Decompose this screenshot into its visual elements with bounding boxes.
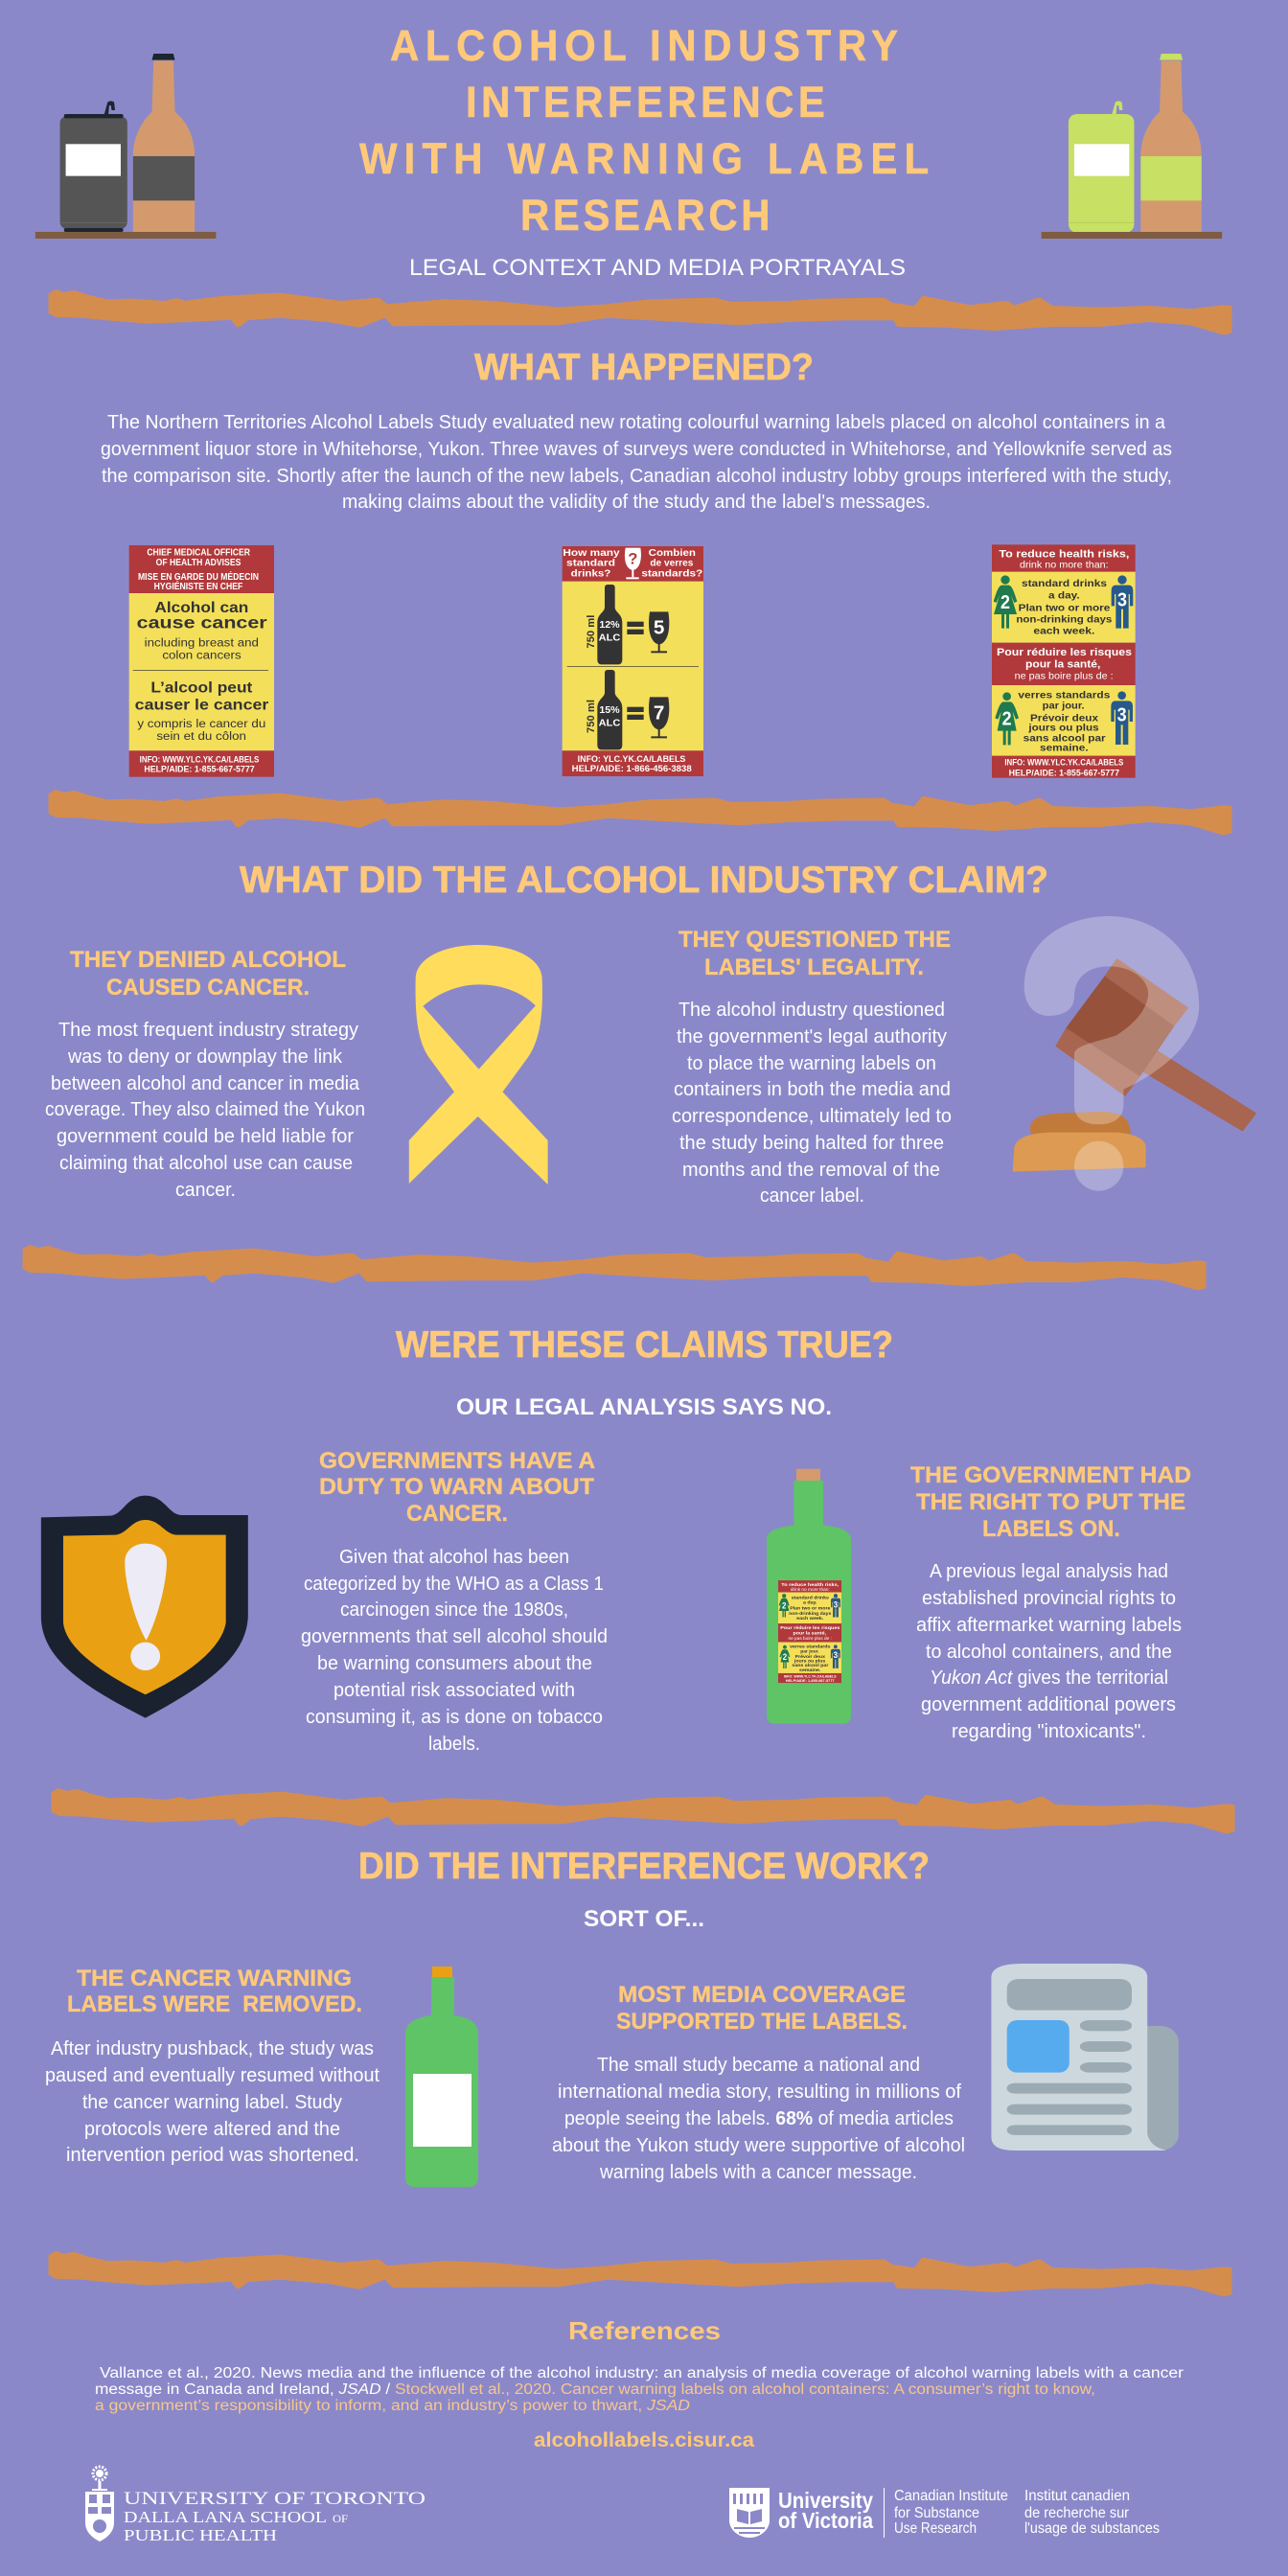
heading: labels removed: LABELS WERE REMOVED. (67, 1991, 362, 2017)
text: right to put labels body: affix aftermarket warning labels (916, 1614, 1182, 1636)
heading: they denied (70, 947, 346, 1000)
warning label: reduce health risks: HELP/AIDE: 1-855-667-5777 (1009, 768, 1119, 777)
subtitle: LEGAL CONTEXT AND MEDIA PORTRAYALS (409, 255, 906, 281)
warning label: standard drinks: ? (628, 550, 637, 568)
intro paragraph (101, 411, 1172, 513)
intro paragraph: making claims about the validity of the study and the label's messages. (342, 491, 931, 513)
warning label: reduce health risks: 3 (1117, 705, 1127, 726)
heading: duty to warn (319, 1448, 595, 1527)
warning label: cancer: causer le cancer (135, 698, 268, 714)
text: duty to warn body (301, 1546, 608, 1755)
warning label: cancer: L’alcool peut (150, 680, 252, 697)
warning label: cancer: INFO: WWW.YLC.YK.CA/LABELS (140, 754, 259, 764)
warning label: standard drinks: Combien (649, 548, 696, 559)
heading: labels removed: THE CANCER WARNING (77, 1966, 352, 1991)
logo: University of Victoria CISUR: Canadian Institute (894, 2488, 1008, 2504)
text: right to put labels body: government additional powers (921, 1693, 1176, 1715)
heading: did the interference work: DID THE INTERFERENCE WORK? (358, 1846, 930, 1887)
warning label: reduce health risks: par jour. (1043, 702, 1085, 712)
text: references: a government’s responsibility to inform, and an industry’s power to thwart, JSAD (95, 2398, 690, 2414)
logo: University of Victoria CISUR: Institut canadien (1024, 2488, 1130, 2504)
warning label: cancer: including breast and (145, 635, 259, 649)
warning label: cancer: HELP/AIDE: 1-855-667-5777 (144, 764, 255, 773)
heading: right to put labels (910, 1462, 1191, 1542)
text: questioned body: the government's legal authority (677, 1025, 948, 1047)
warning label: reduce health risks: Plan two or more (1019, 604, 1111, 614)
warning label: standard drinks: drinks? (571, 569, 610, 580)
heading: were these claims true: WERE THESE CLAIMS TRUE? (396, 1324, 893, 1366)
title (359, 23, 929, 240)
warning label: standard drinks: 5 (654, 617, 664, 639)
subheading: our legal analysis: OUR LEGAL ANALYSIS SAYS NO. (456, 1394, 832, 1420)
warning label: standard drinks: 7 (654, 702, 664, 724)
warning label: reduce health risks: jours ou plus (1027, 724, 1099, 734)
panel: labels removed (45, 1966, 380, 2166)
title: ALCOHOL INDUSTRY (390, 23, 898, 70)
panel: right to put labels (910, 1462, 1191, 1742)
warning label: reduce health risks: a day. (1048, 590, 1080, 601)
warning label: standard drinks: INFO: YLC.YK.CA/LABELS (578, 754, 685, 764)
logo: University of Victoria CISUR: of Victoria (778, 2508, 873, 2533)
panel: denied cancer (45, 947, 365, 1201)
icon: green can and bottle on shelf (1042, 54, 1222, 239)
warning label: reduce health risks: sans alcool par (1024, 733, 1106, 744)
warning label: cancer: CHIEF MEDICAL OFFICER (147, 547, 250, 558)
text: right to put labels body (916, 1560, 1182, 1742)
logo: University of Victoria CISUR: l'usage de substances (1024, 2520, 1160, 2537)
text: media coverage body: people seeing the labels. 68% of media articles (564, 2107, 954, 2129)
logo: University of Toronto: UNIVERSITY OF TORONTO (124, 2489, 426, 2509)
warning label: reduce health risks: standard drinks (1022, 579, 1108, 589)
text: denied body: was to deny or downplay the link (67, 1046, 343, 1068)
text: labels removed body: After industry pushback, the study was (51, 2037, 374, 2059)
text: denied body (45, 1019, 365, 1201)
warning label: reduce health risks: semaine. (1040, 744, 1089, 754)
icon: warning shield (41, 1496, 248, 1718)
heading: duty to warn: DUTY TO WARN ABOUT (319, 1474, 594, 1500)
warning label: cancer: cause cancer (137, 613, 267, 632)
heading: right to put labels: THE RIGHT TO PUT THE (916, 1489, 1185, 1515)
logo: University of Victoria CISUR: University (778, 2488, 873, 2513)
heading: references: References (568, 2316, 721, 2345)
heading: media coverage (616, 1982, 908, 2035)
subheading: sort of: SORT OF... (584, 1906, 704, 1932)
warning label: standard drinks: ALC (599, 633, 620, 644)
text: right to put labels body: to alcohol containers, and the (926, 1641, 1172, 1663)
warning label: standard drinks: 15% (599, 705, 620, 716)
text: duty to warn body: Given that alcohol has been (339, 1546, 569, 1568)
text: questioned body (672, 999, 952, 1207)
warning label: reduce health risks: 3 (1117, 590, 1127, 611)
text: denied body: between alcohol and cancer in media (51, 1072, 360, 1094)
warning label: cancer: Alcohol can (154, 600, 248, 616)
icon: green bottle blank label (405, 1966, 478, 2187)
text: media coverage body (552, 2054, 965, 2183)
heading: they questioned (678, 927, 951, 980)
warning label: cancer: OF HEALTH ADVISES (156, 558, 242, 568)
warning label: reduce health risks: Pour réduire les risques (997, 647, 1132, 658)
warning label: standard drinks: ALC (599, 718, 620, 728)
logo: University of Toronto: OF (333, 2512, 348, 2525)
warning label: cancer: y compris le cancer du (137, 717, 265, 730)
text: media coverage body: warning labels with a cancer message. (599, 2161, 917, 2183)
heading: what happened: WHAT HAPPENED? (474, 347, 814, 388)
text: questioned body: to place the warning labels on (687, 1052, 936, 1074)
text: labels removed body: paused and eventually resumed without (45, 2064, 380, 2086)
text: references: message in Canada and Ireland, JSAD / Stockwell et al., 2020. Cancer warning labels on alcohol containers: A consumer’s right to know, (95, 2381, 1095, 2398)
title: INTERFERENCE (466, 80, 825, 126)
text: duty to warn body: consuming it, as is done on tobacco (306, 1706, 603, 1728)
link: project website: alcohollabels.cisur.ca (534, 2429, 754, 2451)
warning label: standard drinks: de verres (650, 559, 694, 569)
text: denied body: government could be held liable for (57, 1125, 354, 1147)
text: media coverage body: The small study became a national and (597, 2054, 920, 2076)
text: labels removed body (45, 2037, 380, 2166)
warning label: standard drinks: 12% (599, 620, 620, 631)
warning label: reduce health risks: To reduce health risks, (999, 548, 1129, 560)
warning label: cancer: MISE EN GARDE DU MÉDECIN (138, 570, 259, 583)
logo: University of Toronto: PUBLIC HEALTH (124, 2526, 277, 2544)
text: duty to warn body: carcinogen since the 1980s, (340, 1598, 568, 1621)
warning label: standard drinks: standards? (641, 569, 702, 580)
warning label: reduce health risks: each week. (1033, 627, 1095, 637)
warning label: cancer: colon cancers (162, 649, 242, 662)
heading: media coverage: SUPPORTED THE LABELS. (616, 2009, 908, 2035)
warning label: reduce health risks: INFO: WWW.YLC.YK.CA/LABELS (1004, 758, 1123, 768)
text: right to put labels body: A previous legal analysis had (930, 1560, 1168, 1582)
intro paragraph: The Northern Territories Alcohol Labels Study evaluated new rotating colourful warning labels placed on alcohol containers in a (107, 411, 1166, 433)
warning label: reduce health risks: pour la santé, (1025, 659, 1100, 671)
warning label: standard drinks: 750 ml (586, 615, 597, 649)
heading: they questioned: THEY QUESTIONED THE (678, 927, 951, 953)
text: labels removed body: protocols were altered and the (84, 2118, 340, 2140)
text: denied body: claiming that alcohol use can cause (59, 1152, 353, 1174)
logo: University of Victoria CISUR: Use Research (894, 2520, 977, 2537)
heading: right to put labels: LABELS ON. (982, 1516, 1120, 1542)
title: WITH WARNING LABEL (359, 136, 929, 183)
text: duty to warn body: potential risk associated with (334, 1679, 575, 1701)
text: references (95, 2365, 1184, 2414)
text: right to put labels body: established provincial rights to (922, 1587, 1176, 1609)
heading: what did the alcohol industry claim: WHAT DID THE ALCOHOL INDUSTRY CLAIM? (240, 860, 1048, 901)
text: duty to warn body: labels. (428, 1733, 480, 1755)
warning label: reduce health risks (992, 544, 1136, 778)
panel: media coverage (552, 1982, 965, 2183)
logo: University of Toronto: DALLA LANA SCHOOL (124, 2508, 327, 2526)
warning label: cancer (129, 545, 274, 777)
text: media coverage body: about the Yukon study were supportive of alcohol (552, 2134, 965, 2156)
intro paragraph: government liquor store in Whitehorse, Yukon. Three waves of surveys were conducted in Whitehorse, and Yellowknife served as (101, 438, 1172, 460)
text: media coverage body: international media story, resulting in millions of (558, 2081, 961, 2103)
icon: yellow ribbon (409, 945, 548, 1184)
icon: green bottle with label (767, 1469, 851, 1724)
text: questioned body: months and the removal of the (682, 1159, 940, 1181)
text: right to put labels body: regarding "intoxicants". (952, 1720, 1146, 1742)
text: questioned body: cancer label. (760, 1184, 864, 1207)
text: questioned body: containers in both the media and (674, 1078, 951, 1100)
text: denied body: cancer. (175, 1179, 236, 1201)
heading: right to put labels: THE GOVERNMENT HAD (910, 1462, 1191, 1488)
warning label: standard drinks: HELP/AIDE: 1-866-456-3838 (572, 764, 692, 773)
text: right to put labels body: Yukon Act gives the territorial (930, 1667, 1168, 1689)
warning label: cancer: sein et du côlon (156, 729, 246, 743)
text: denied body: coverage. They also claimed the Yukon (45, 1098, 365, 1120)
warning label: reduce health risks: non-drinking days (1016, 615, 1113, 626)
warning label: reduce health risks: 2 (1000, 592, 1010, 613)
logo: University of Toronto (85, 2467, 426, 2544)
panel: duty to warn (301, 1448, 608, 1755)
heading: duty to warn: CANCER. (406, 1501, 508, 1527)
intro paragraph: the comparison site. Shortly after the launch of the new labels, Canadian alcohol industry lobby groups interfered with the study, (102, 465, 1172, 487)
icon: newspaper (991, 1964, 1179, 2150)
logo: University of Victoria CISUR (729, 2488, 1160, 2538)
warning label: cancer: HYGIÉNISTE EN CHEF (154, 580, 242, 592)
warning label: reduce health risks: ne pas boire plus de : (1015, 672, 1114, 682)
warning label: standard drinks: 750 ml (586, 700, 597, 733)
warning label: reduce health risks: Prévoir deux (1030, 713, 1099, 724)
text: questioned body: correspondence, ultimately led to (672, 1105, 952, 1127)
text: references: Vallance et al., 2020. News media and the influence of the alcohol industry: an analysis of media coverage of alcohol warning labels with a cancer (100, 2365, 1184, 2381)
text: labels removed body: intervention period was shortened. (66, 2144, 359, 2166)
warning label: reduce health risks: verres standards (1018, 690, 1111, 701)
text: questioned body: the study being halted for three (679, 1132, 944, 1154)
icon: dark can and bottle on shelf (35, 54, 216, 239)
text: duty to warn body: governments that sell alcohol should (301, 1625, 608, 1647)
logo: University of Victoria CISUR: de recherche sur (1024, 2505, 1129, 2521)
warning label: standard drinks: How many (563, 548, 620, 559)
heading: they questioned: LABELS' LEGALITY. (704, 954, 924, 980)
warning label: reduce health risks: 2 (1002, 709, 1012, 730)
heading: labels removed (67, 1966, 362, 2017)
title: RESEARCH (520, 193, 770, 240)
panel: questioned legality (672, 927, 952, 1207)
text: questioned body: The alcohol industry questioned (678, 999, 945, 1021)
heading: they denied: THEY DENIED ALCOHOL (70, 947, 346, 973)
warning label: standard drinks: standard (566, 559, 615, 569)
heading: duty to warn: GOVERNMENTS HAVE A (319, 1448, 595, 1474)
icon: gavel and question mark (1013, 916, 1256, 1191)
text: denied body: The most frequent industry strategy (58, 1019, 359, 1041)
logo: University of Victoria CISUR: for Substance (894, 2505, 979, 2521)
text: duty to warn body: categorized by the WHO as a Class 1 (304, 1573, 604, 1595)
heading: they denied: CAUSED CANCER. (106, 975, 310, 1000)
text: duty to warn body: be warning consumers about the (317, 1652, 592, 1674)
heading: media coverage: MOST MEDIA COVERAGE (618, 1982, 906, 2008)
text: labels removed body: the cancer warning label. Study (82, 2091, 343, 2113)
warning label: standard drinks (563, 546, 703, 776)
warning label: reduce health risks: drink no more than: (1020, 561, 1109, 571)
